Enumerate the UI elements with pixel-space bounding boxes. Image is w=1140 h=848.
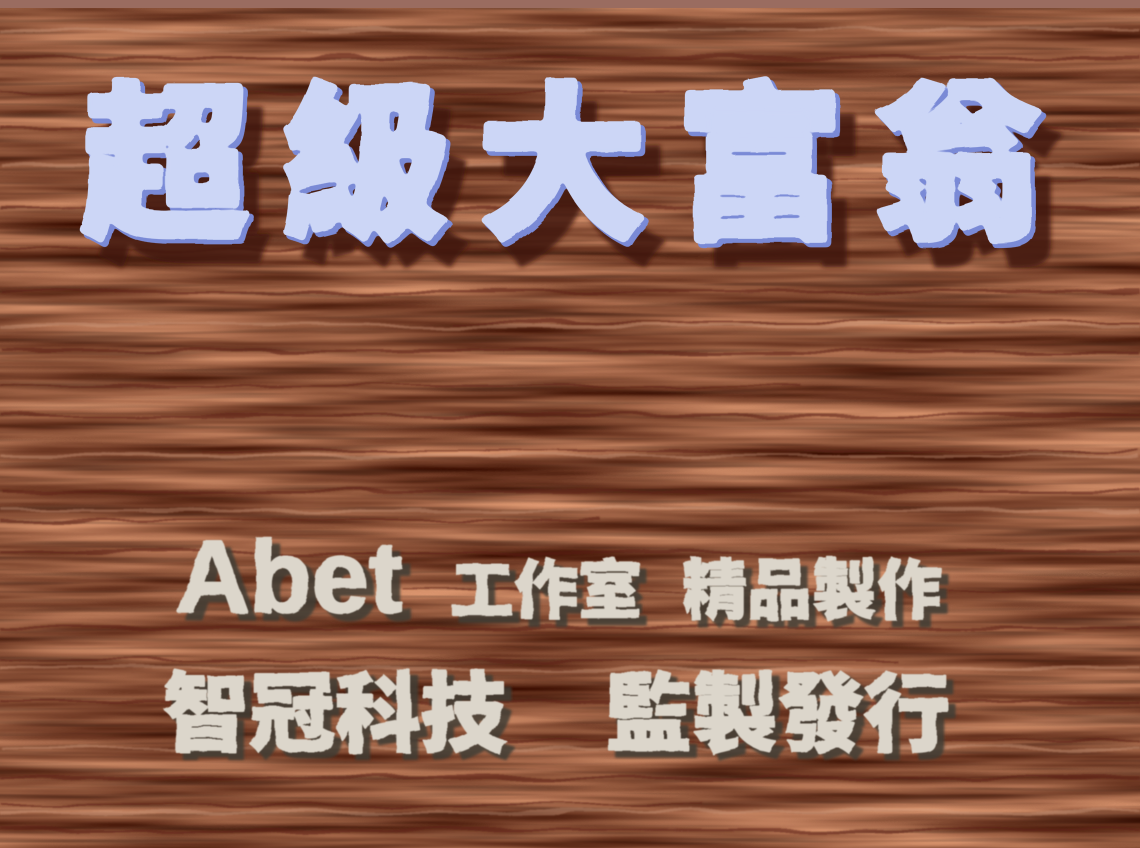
title side extrusion: 富 bbox=[679, 76, 849, 266]
title face: 富 bbox=[675, 72, 845, 262]
title drop shadow: 富 bbox=[695, 96, 865, 286]
title side extrusion: 大 bbox=[481, 76, 651, 266]
publisher line shadow: 監製發行 bbox=[613, 673, 957, 769]
credit line shadow: 工作室 bbox=[457, 562, 649, 634]
title face: 級 bbox=[280, 72, 450, 262]
title drop shadow bbox=[100, 96, 1062, 286]
credit line face: 工作室 bbox=[450, 555, 642, 627]
title side extrusion: 超 bbox=[84, 76, 254, 266]
title side extrusion bbox=[84, 76, 1046, 266]
title side extrusion: 翁 bbox=[876, 76, 1046, 266]
title drop shadow: 翁 bbox=[892, 96, 1062, 286]
title drop shadow: 級 bbox=[300, 96, 470, 286]
credit line face: Abet bbox=[176, 520, 403, 634]
title face: 翁 bbox=[872, 72, 1042, 262]
publisher line: 智冠科技 監製發行 bbox=[163, 667, 957, 769]
title side extrusion: 級 bbox=[284, 76, 454, 266]
title drop shadow: 大 bbox=[497, 96, 667, 286]
title face bbox=[80, 72, 1042, 262]
credit line: Abet 工作室 精品製作 bbox=[176, 520, 949, 641]
publisher line shadow bbox=[170, 673, 957, 769]
title: 超級大富翁 bbox=[80, 72, 1062, 286]
credit line shadow: Abet bbox=[184, 527, 411, 641]
title drop shadow: 超 bbox=[100, 96, 270, 286]
credit line shadow bbox=[184, 527, 949, 641]
credit line shadow: 精品製作 bbox=[689, 561, 949, 634]
publisher line shadow: 智冠科技 bbox=[170, 673, 514, 769]
publisher line face bbox=[163, 667, 950, 763]
title face: 大 bbox=[477, 72, 647, 262]
publisher line face: 智冠科技 bbox=[163, 667, 507, 763]
credit line face: 精品製作 bbox=[682, 554, 942, 627]
publisher line face: 監製發行 bbox=[606, 667, 950, 763]
credit line face bbox=[176, 520, 942, 634]
title face: 超 bbox=[80, 72, 250, 262]
